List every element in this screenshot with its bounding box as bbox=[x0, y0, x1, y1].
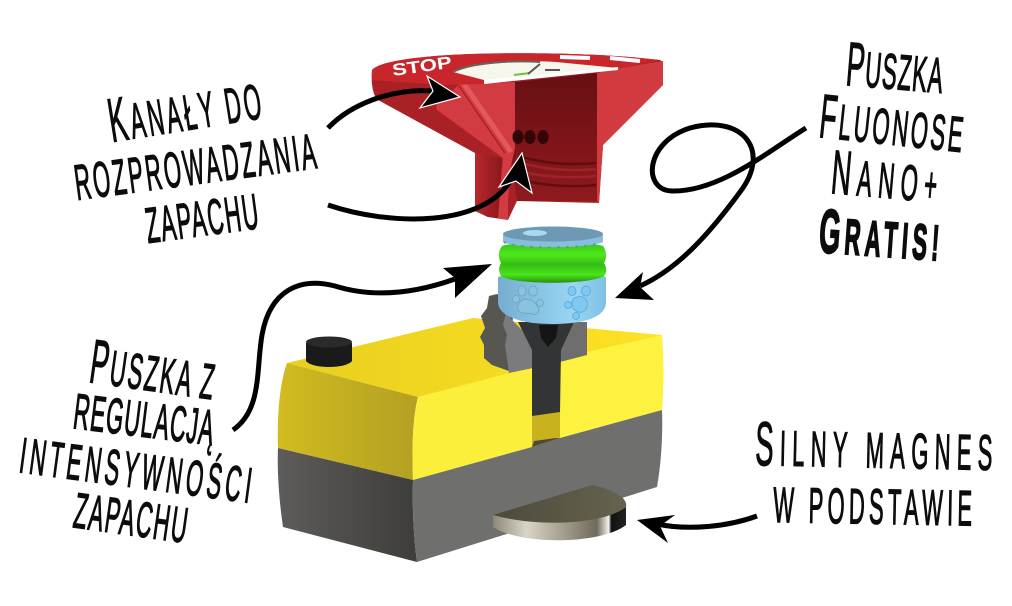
arrow: fluonose can bbox=[615, 125, 806, 300]
label: Fluonose Nano+: GRATIS! bbox=[817, 198, 942, 275]
yellow front face left bbox=[413, 367, 532, 480]
cap cut face right bbox=[597, 61, 663, 203]
yellow left face bbox=[278, 363, 418, 480]
magnet bbox=[493, 485, 626, 540]
blue cap knurled bbox=[503, 235, 603, 247]
label: magnet bbox=[755, 411, 993, 537]
yellow and grey base block bbox=[278, 318, 664, 562]
label: magnet: SILNY MAGNES bbox=[755, 411, 993, 484]
cap outer body bbox=[372, 53, 663, 220]
top print with STOP lettering bbox=[372, 53, 660, 85]
label: magnet: W PODSTAWIE bbox=[773, 478, 973, 537]
green seal bbox=[499, 242, 606, 283]
grey wall behind stem bbox=[560, 322, 587, 362]
cap inner cavity bbox=[512, 73, 597, 201]
label: adjustable can bbox=[16, 328, 255, 554]
label: adjustable can: INTENSYWNOŚCI bbox=[16, 426, 255, 514]
label: adjustable can: PUSZKA Z bbox=[86, 328, 219, 413]
lower blue ring with paws bbox=[498, 272, 606, 324]
label: adjustable can: ZAPACHU bbox=[70, 483, 191, 554]
red cap cross-section bbox=[372, 53, 663, 220]
paw print right bbox=[564, 286, 590, 320]
label: Fluonose Nano+ bbox=[817, 31, 967, 275]
grey front face bbox=[413, 410, 662, 562]
label: Fluonose Nano+: NANO+ bbox=[829, 139, 940, 216]
threaded grey tube bbox=[480, 294, 513, 372]
scent channel bbox=[464, 84, 511, 152]
dark inner stem bbox=[518, 322, 574, 416]
paw print left bbox=[512, 286, 544, 314]
top print with STOP lettering: STOP bbox=[391, 53, 453, 80]
knob bbox=[306, 336, 352, 367]
air holes bbox=[512, 130, 548, 144]
grey left face bbox=[278, 448, 417, 562]
channel in block bbox=[532, 412, 560, 447]
arrow: adjustable can bbox=[233, 264, 492, 430]
label: adjustable can: REGULACJĄ bbox=[71, 384, 217, 457]
label: channels: KANAŁY DO bbox=[103, 64, 265, 156]
adjustable container holder bbox=[480, 294, 587, 416]
label: Fluonose Nano+: FLUONOSE bbox=[817, 83, 967, 166]
thread ridges bbox=[522, 157, 596, 186]
notched cut wall bbox=[503, 312, 534, 373]
arrow: channels bottom bbox=[328, 153, 532, 219]
arrow: magnet bbox=[637, 515, 757, 543]
arrow: channels top bbox=[328, 76, 460, 128]
label: channels: ZAPACHU bbox=[142, 184, 262, 255]
cap cut face left bbox=[436, 82, 515, 220]
cap neck bbox=[475, 153, 502, 218]
label: Fluonose Nano+: PUSZKA bbox=[844, 31, 946, 107]
label: channels bbox=[71, 64, 319, 255]
yellow front face right bbox=[560, 335, 664, 438]
label: channels: ROZPROWADZANIA bbox=[71, 124, 319, 212]
Fluonose Nano+ can bbox=[498, 226, 606, 324]
yellow top face bbox=[287, 318, 662, 397]
